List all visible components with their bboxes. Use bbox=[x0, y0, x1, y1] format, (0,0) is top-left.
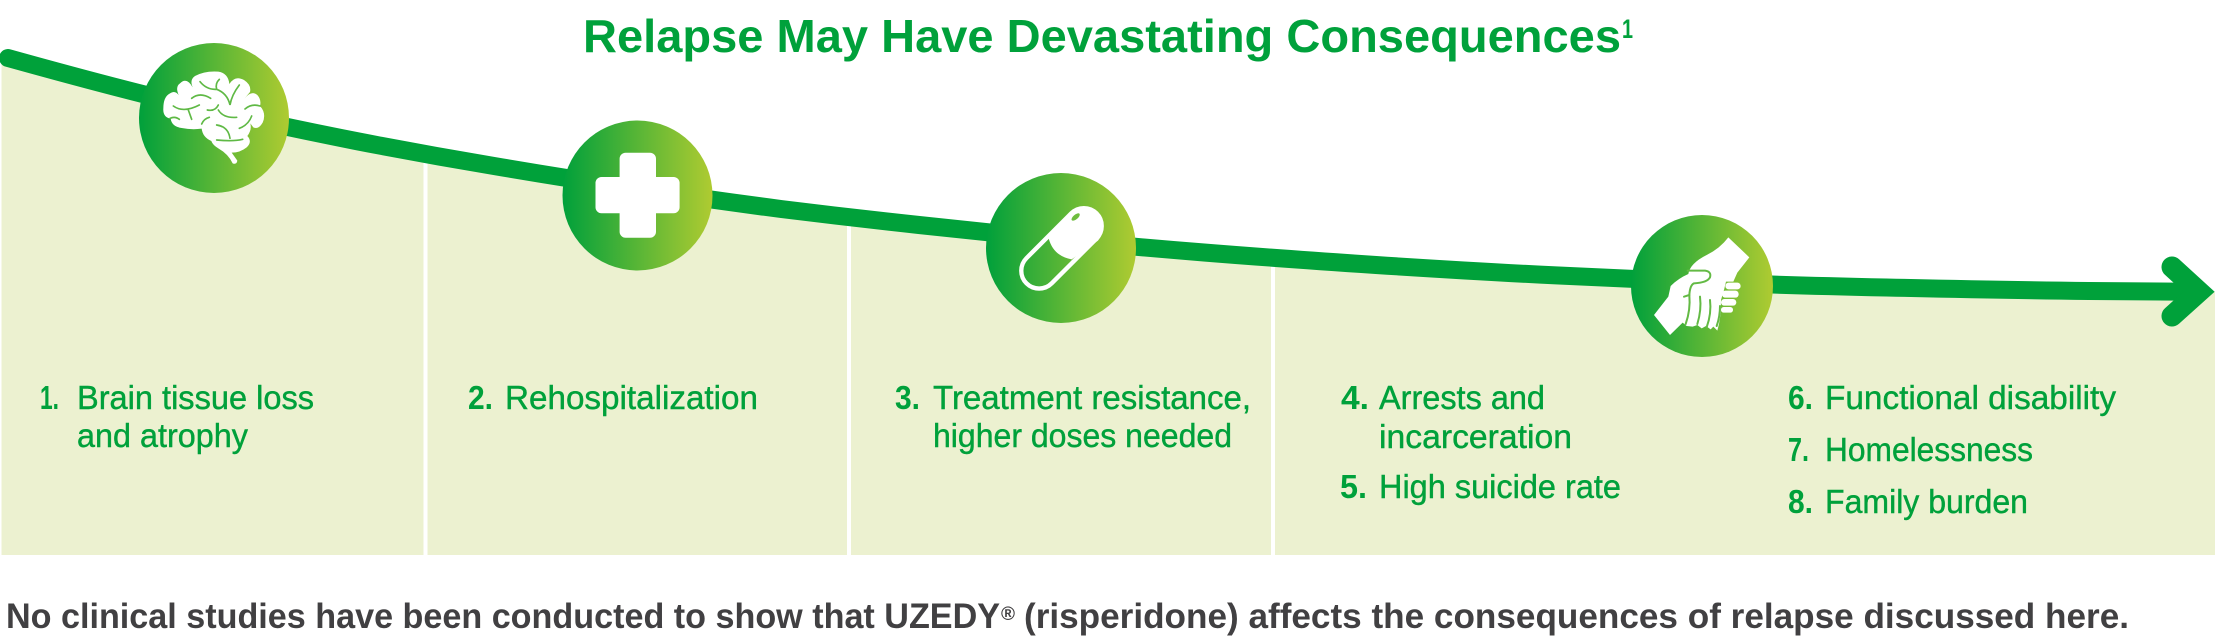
item 4: arrests and incarceration: Arrests and bbox=[1379, 379, 1545, 416]
item 3: treatment resistance: higher doses needed bbox=[933, 417, 1232, 454]
item 4: arrests and incarceration: 4. bbox=[1341, 379, 1369, 416]
item 6: functional disability: Functional disability bbox=[1825, 379, 2116, 416]
item 5: high suicide rate: High suicide rate bbox=[1379, 468, 1621, 505]
item 7: homelessness: Homelessness bbox=[1825, 431, 2033, 468]
item 4: arrests and incarceration: incarceration bbox=[1379, 418, 1572, 455]
column dividers bbox=[424, 140, 1275, 555]
item 3: treatment resistance bbox=[895, 379, 1251, 454]
icon: capsule pill bbox=[986, 173, 1136, 323]
item 8: family burden: 8. bbox=[1788, 483, 1813, 520]
arrow: downward relapse curve bbox=[8, 58, 2199, 316]
footnote: (risperidone) affects the consequences of relapse discussed here. bbox=[1024, 597, 2129, 636]
item 4: arrests and incarceration bbox=[1341, 379, 1572, 455]
footnote: No clinical studies have been conducted to show that UZEDY bbox=[6, 597, 1000, 636]
footnote: ® bbox=[1001, 604, 1015, 625]
item 7: homelessness: 7. bbox=[1788, 431, 1809, 468]
icon: medical cross bbox=[562, 120, 712, 270]
icon: brain bbox=[139, 43, 289, 193]
item 6: functional disability: 6. bbox=[1788, 379, 1813, 416]
panel: pale green area under curve bbox=[2, 58, 2215, 555]
footnote bbox=[6, 597, 2129, 636]
item 3: treatment resistance: Treatment resistance, bbox=[933, 379, 1251, 416]
item 1: brain tissue loss: 1. bbox=[40, 379, 59, 416]
item 3: treatment resistance: 3. bbox=[895, 379, 920, 416]
item 8: family burden: Family burden bbox=[1825, 483, 2028, 520]
item 1: brain tissue loss bbox=[40, 379, 314, 454]
item 1: brain tissue loss: and atrophy bbox=[77, 417, 248, 454]
item 1: brain tissue loss: Brain tissue loss bbox=[77, 379, 314, 416]
title: Relapse May Have Devastating Consequences bbox=[583, 10, 1621, 62]
item 5: high suicide rate: 5. bbox=[1340, 468, 1367, 505]
icon: helping hands bbox=[1631, 215, 1773, 357]
title: 1 bbox=[1622, 14, 1633, 44]
item 2: rehospitalization: Rehospitalization bbox=[505, 379, 758, 416]
item 2: rehospitalization: 2. bbox=[468, 379, 493, 416]
